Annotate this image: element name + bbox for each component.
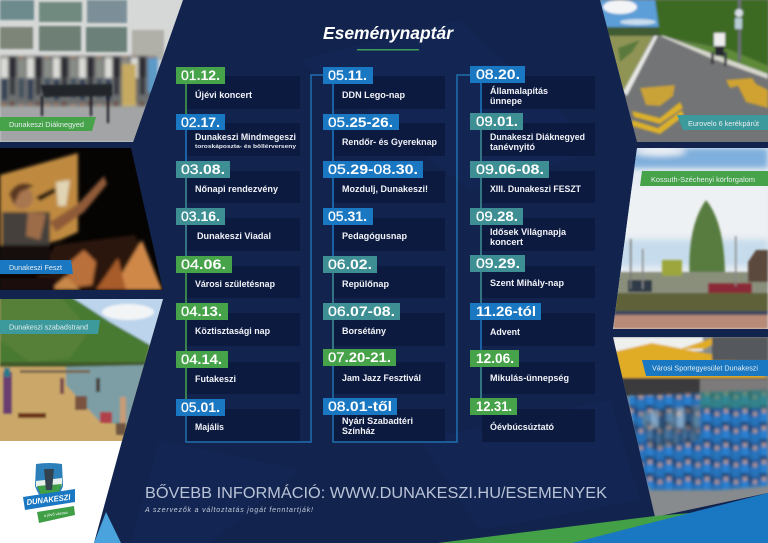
- date: 05.29-08.30.: 05.29-08.30.: [328, 161, 418, 177]
- photo: Kossuth-Széchenyi körforgalom: [613, 148, 768, 329]
- photo: Eurovelo 6 kerékpárút: [600, 0, 768, 142]
- event: Nyári Szabadtéri Színház: Színház: [342, 426, 375, 436]
- event: Idősek Világnapja koncert: koncert: [490, 237, 523, 247]
- event: DDN Lego-nap: DDN Lego-nap: [342, 90, 406, 100]
- date: 03.08.: 03.08.: [181, 161, 225, 177]
- date: 09.06-08.: 09.06-08.: [476, 161, 544, 177]
- logo: Dunakeszi: a jövő városa: [43, 510, 69, 518]
- date: 11.26-tól: 11.26-tól: [476, 303, 536, 319]
- event: Repülőnap: Repülőnap: [342, 279, 390, 289]
- event panels: [187, 76, 595, 442]
- label: Kossuth-Széchenyi körforgalom: Kossuth-Széchenyi körforgalom: [651, 175, 755, 184]
- label: Dunakeszi Diáknegyed: [0, 117, 96, 131]
- date: 04.13.: 04.13.: [181, 303, 222, 319]
- event: Advent: Advent: [490, 327, 520, 337]
- white logo area: [0, 441, 122, 543]
- label: Dunakeszi Feszt: [0, 260, 73, 274]
- footer: disclaimer: A szervezők a változtatás jogát fenntartják!: [144, 507, 313, 514]
- photo: Dunakeszi Feszt: [0, 148, 163, 290]
- background facets: [130, 20, 640, 543]
- date: 05.25-26.: 05.25-26.: [328, 114, 393, 130]
- label: Eurovelo 6 kerékpárút: Eurovelo 6 kerékpárút: [688, 119, 760, 128]
- event: Jam Jazz Fesztivál: Jam Jazz Fesztivál: [342, 373, 421, 383]
- date: 09.01.: 09.01.: [476, 113, 518, 129]
- event: Mozdulj, Dunakeszi!: Mozdulj, Dunakeszi!: [342, 184, 428, 194]
- date: 02.17.: 02.17.: [181, 114, 220, 130]
- label: Dunakeszi Feszt: Dunakeszi Feszt: [9, 263, 63, 272]
- green bottom band: [438, 513, 690, 543]
- event: Köztisztasági nap: Köztisztasági nap: [195, 326, 270, 336]
- date: 04.14.: 04.14.: [181, 351, 222, 367]
- date: 05.31.: 05.31.: [328, 208, 367, 224]
- event: Nyári Szabadtéri Színház: Nyári Szabadtéri: [342, 416, 413, 426]
- date: 12.06.: 12.06.: [476, 350, 514, 366]
- event: Idősek Világnapja koncert: Idősek Világnapja: [490, 227, 567, 237]
- logo: Dunakeszi: [23, 463, 75, 523]
- label: Dunakeszi szabadstrand: [0, 320, 100, 334]
- column 1: January to May: [176, 67, 297, 432]
- event: Dunakeszi Diáknegyed tanévnyitó: [490, 132, 585, 152]
- date: 09.29.: 09.29.: [476, 255, 520, 271]
- event: Városi születésnap: Városi születésnap: [195, 279, 275, 289]
- photo: Dunakeszi szabadstrand: [0, 296, 166, 441]
- event: Pedagógusnap: Pedagógusnap: [342, 231, 407, 241]
- date: 07.20-21.: 07.20-21.: [328, 349, 391, 365]
- photo: Városi Sportegyesület Dunakeszi: [613, 337, 768, 517]
- blue bottom corner: [572, 493, 768, 543]
- event: Dunakeszi Mindmegeszi: toroskáposzta- és böllérverseny: [195, 144, 297, 150]
- column 3: August to December: [470, 66, 585, 432]
- event: Rendőr- és Gyereknap: Rendőr- és Gyereknap: [342, 137, 437, 147]
- event: Borsétány: Borsétány: [342, 326, 386, 336]
- event: Államalapítás ünnepe: [490, 86, 548, 106]
- date: 04.06.: 04.06.: [181, 256, 226, 272]
- label: Városi Sportegyesület Dunakeszi: [642, 360, 768, 376]
- label: Dunakeszi Diáknegyed: Dunakeszi Diáknegyed: [9, 120, 84, 129]
- date: 08.20.: 08.20.: [476, 66, 520, 82]
- logo: Dunakeszi: DUNAKESZI: [26, 493, 72, 507]
- event: Nőnapi rendezvény: Nőnapi rendezvény: [195, 184, 278, 194]
- title: Eseménynaptár: [323, 23, 454, 43]
- label: Városi Sportegyesület Dunakeszi: Városi Sportegyesület Dunakeszi: [652, 364, 758, 372]
- date: 01.12.: 01.12.: [181, 67, 220, 83]
- event: Dunakeszi Viadal: Dunakeszi Viadal: [197, 231, 271, 241]
- column 2: May to August: [323, 67, 437, 436]
- event: Dunakeszi Diáknegyed tanévnyitó: tanévnyitó: [490, 142, 535, 152]
- event: Dunakeszi Diáknegyed tanévnyitó: Dunakeszi Diáknegyed: [490, 132, 585, 142]
- event: Újévi koncert: Újévi koncert: [195, 89, 252, 100]
- date: 08.01-től: 08.01-től: [328, 398, 392, 414]
- date: 12.31.: 12.31.: [476, 398, 512, 414]
- date: 06.07-08.: 06.07-08.: [328, 303, 395, 319]
- date: 05.01.: 05.01.: [181, 399, 220, 415]
- date: 05.11.: 05.11.: [328, 67, 367, 83]
- label: Dunakeszi szabadstrand: Dunakeszi szabadstrand: [9, 322, 88, 332]
- event: Dunakeszi Mindmegeszi: Dunakeszi Mindmegeszi: [195, 132, 296, 142]
- date: 09.28.: 09.28.: [476, 208, 518, 224]
- event: Dunakeszi Mindmegeszi: [195, 132, 297, 150]
- date: 04.06.: [176, 256, 232, 273]
- photo: Dunakeszi Diáknegyed: [0, 0, 183, 142]
- event: Szent Mihály-nap: Szent Mihály-nap: [490, 278, 564, 288]
- footer: more information: BŐVEBB INFORMÁCIÓ: WWW.DUNAKESZI.HU/ESEMENYEK: [145, 483, 607, 502]
- timeline lines: [186, 75, 481, 442]
- date: 03.16.: 03.16.: [181, 208, 220, 224]
- event: Majális: Majális: [195, 422, 224, 432]
- event: Államalapítás ünnepe: Államalapítás: [490, 86, 548, 96]
- event: Futakeszi: Futakeszi: [195, 374, 236, 384]
- date: 06.02.: 06.02.: [328, 256, 372, 272]
- event: Nyári Szabadtéri Színház: [342, 416, 413, 436]
- event: Államalapítás ünnepe: ünnepe: [490, 96, 522, 106]
- event: XIII. Dunakeszi FESZT: XIII. Dunakeszi FESZT: [490, 184, 581, 194]
- event: Mikulás-ünnepség: Mikulás-ünnepség: [490, 373, 569, 383]
- event: Idősek Világnapja koncert: [490, 227, 567, 247]
- light blue corner triangle: [94, 512, 121, 543]
- label: Eurovelo 6 kerékpárút: [677, 115, 768, 130]
- event: Óévbúcsúztató: Óévbúcsúztató: [490, 421, 554, 432]
- label: Kossuth-Széchenyi körforgalom: [640, 171, 768, 186]
